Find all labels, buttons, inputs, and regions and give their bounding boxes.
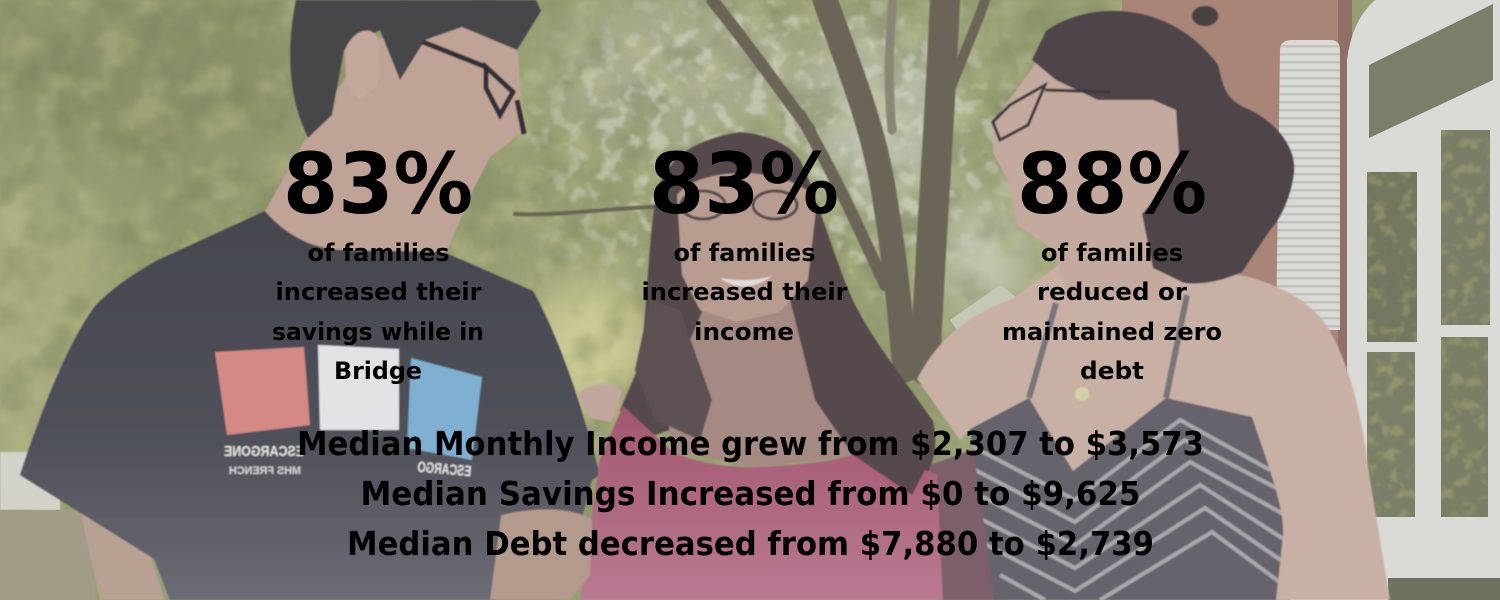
- savings description: [272, 239, 484, 385]
- girl in the middle: [490, 132, 1000, 600]
- middle girl: left hair strand: [635, 300, 712, 440]
- distant white building: [0, 452, 60, 510]
- right woman: straps and necklace: [1029, 295, 1187, 401]
- linked hands: [490, 509, 592, 600]
- boy: shirt print panels: ESCARGONE: [224, 443, 304, 460]
- boy: shirt print panels: MHS FRENCH: [229, 465, 301, 477]
- right woman: shoulders and arm: [917, 262, 1390, 600]
- debt description: maintained zero: [1002, 318, 1222, 346]
- savings description: savings while in: [272, 318, 484, 346]
- shrubs under window: [1388, 578, 1500, 600]
- right woman: glasses: [993, 85, 1110, 140]
- statistic: savings: [272, 135, 484, 385]
- middle girl: face: [677, 173, 817, 322]
- savings description: increased their: [276, 278, 482, 306]
- debt description: [1002, 239, 1222, 385]
- income description: of families: [674, 239, 816, 267]
- income percentage: 83%: [649, 135, 839, 233]
- boy: glasses: [423, 42, 524, 134]
- savings description: of families: [308, 239, 450, 267]
- house: brick wall, shutter and window: [1122, 0, 1500, 600]
- boy: ear: [345, 31, 380, 100]
- median figures summary: Median Monthly Income grew from $2,307 to $3,573: [297, 424, 1204, 463]
- middle girl: smile: [720, 276, 772, 287]
- boy: neck and face: [265, 27, 523, 253]
- median figures summary: Median Debt decreased from $7,880 to $2,739: [347, 524, 1154, 563]
- income description: income: [694, 318, 794, 346]
- middle girl: glasses: [681, 191, 797, 219]
- tree trunks: [515, 0, 985, 370]
- debt description: reduced or: [1037, 278, 1187, 306]
- louvred shutter: [1276, 40, 1340, 330]
- right woman: hair: [1032, 11, 1294, 284]
- middle girl: hair: [620, 132, 935, 495]
- median figures summary: [297, 424, 1204, 563]
- income description: [642, 239, 848, 346]
- boy: bare arm: [80, 510, 165, 600]
- debt description: debt: [1080, 357, 1144, 385]
- trees and sky backdrop: [0, 0, 1122, 600]
- debt percentage: 88%: [1017, 135, 1207, 233]
- right woman: face and neck: [993, 40, 1180, 300]
- income description: increased their: [642, 278, 848, 306]
- woman on the right: [917, 6, 1390, 600]
- boy: shirt print panels: [215, 345, 482, 480]
- hedge: [0, 510, 95, 600]
- window panes: [1367, 4, 1493, 517]
- right woman: hair bun top: [1192, 6, 1218, 26]
- right woman: dress: [960, 390, 1290, 600]
- debt description: of families: [1041, 239, 1183, 267]
- pale roof in background: [950, 285, 1020, 335]
- statistic: debt: [1002, 135, 1222, 385]
- median figures summary: Median Savings Increased from $0 to $9,625: [360, 474, 1140, 513]
- middle girl: blouse: [580, 406, 943, 600]
- boy: shirt print panels: ESCARGO: [417, 459, 472, 480]
- darker blouse fold beside the dress: [930, 440, 1000, 600]
- boy on the left: [20, 0, 600, 600]
- middle girl: neck and chest: [665, 300, 853, 467]
- boy: t-shirt: [20, 211, 600, 600]
- savings percentage: 83%: [283, 135, 473, 233]
- boy's hand on shoulder: [577, 384, 622, 422]
- statistic: income: [642, 135, 848, 346]
- savings description: Bridge: [334, 357, 422, 385]
- white window frame: [1290, 0, 1500, 600]
- boy: hair: [290, 0, 541, 138]
